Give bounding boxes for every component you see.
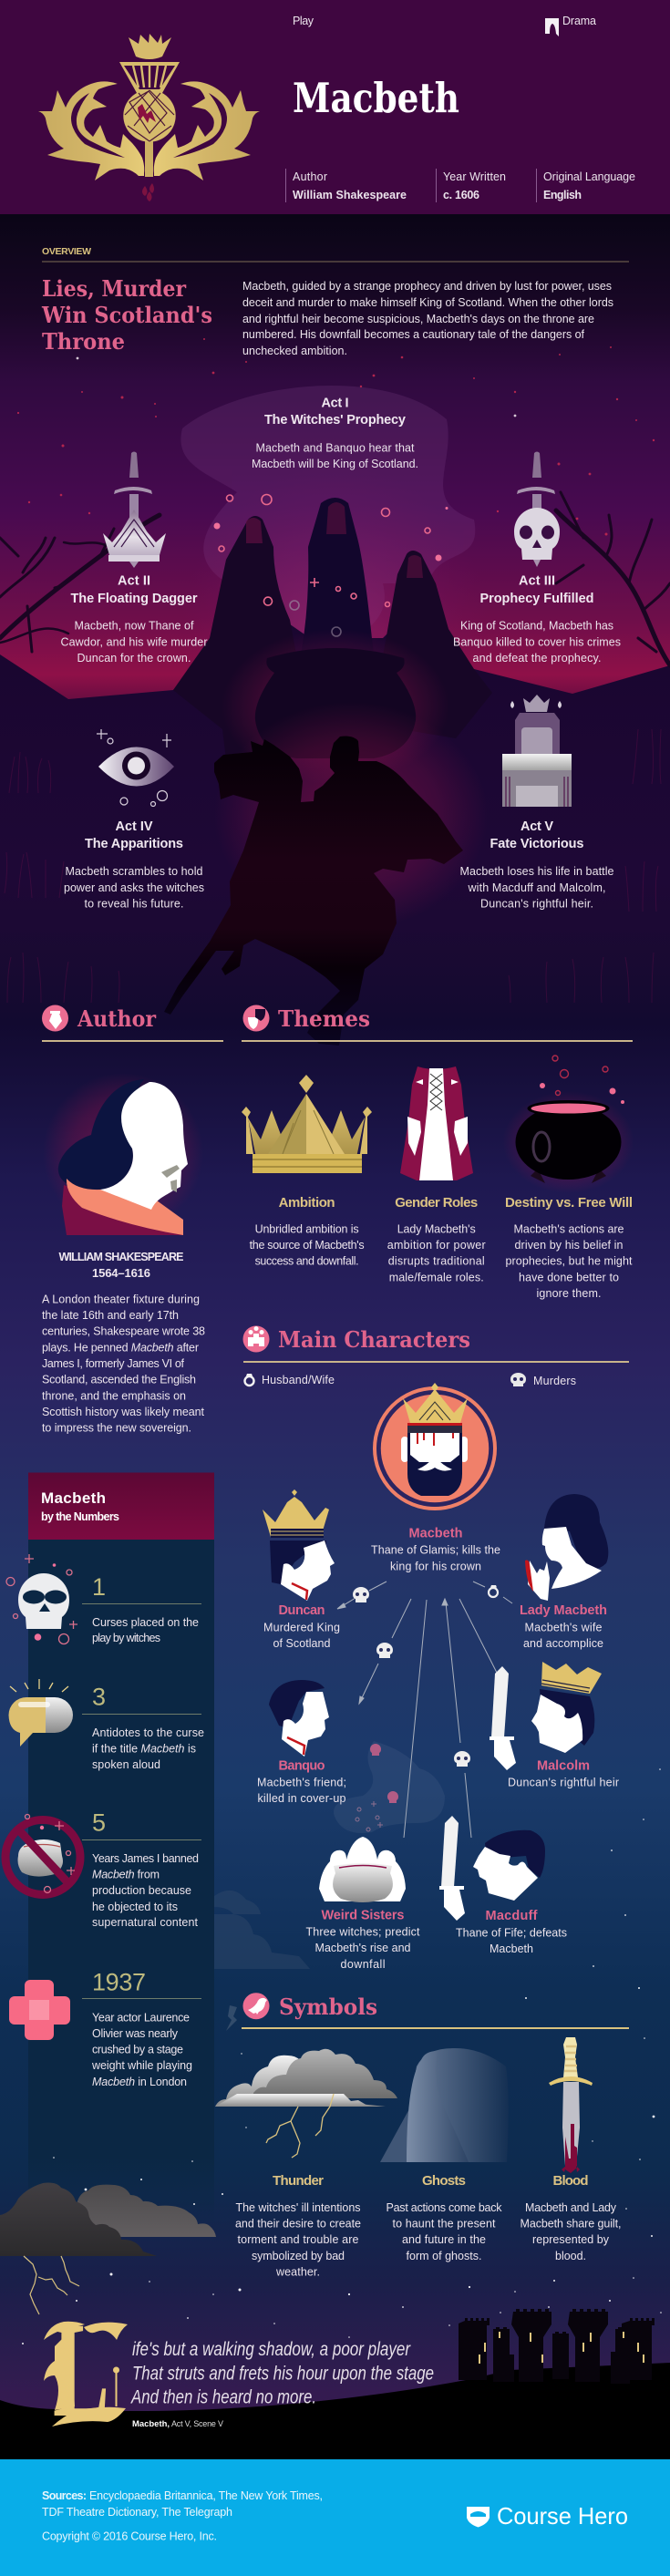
Act V: Fate Victorious bbox=[490, 837, 583, 851]
Act II bbox=[60, 452, 208, 665]
Author heading bbox=[42, 1005, 223, 1042]
stat: 1937 bbox=[9, 1969, 201, 2088]
meta: language: Original Language bbox=[543, 170, 635, 183]
stat: 1937: weight while playing bbox=[91, 2059, 192, 2072]
symbol: thunder bbox=[215, 2049, 397, 2279]
character: Banquo bbox=[257, 1680, 346, 1805]
icon: masks bbox=[248, 1017, 258, 1029]
foreground hill bbox=[0, 2363, 670, 2461]
Symbols heading bbox=[242, 1993, 629, 2029]
cauldron scene bbox=[0, 465, 670, 1030]
genre label bbox=[545, 15, 596, 36]
genre label: Drama bbox=[562, 15, 596, 27]
icon: dagger and crown bbox=[103, 452, 166, 568]
character: Weird Sisters bbox=[306, 1837, 420, 1971]
symbol: ghosts: form of ghosts. bbox=[407, 2250, 481, 2262]
character: Macduff bbox=[439, 1816, 567, 1955]
character: Malcolm: Malcolm bbox=[537, 1759, 590, 1774]
character: Macbeth: Thane of Glamis; kills the bbox=[371, 1544, 500, 1557]
Author biography: throne, and the emphasis on bbox=[42, 1389, 186, 1402]
theme: destiny: have done better to bbox=[519, 1271, 619, 1283]
background clouds bbox=[213, 1891, 310, 2031]
Themes heading bbox=[242, 1005, 633, 1042]
overview paragraph bbox=[242, 280, 613, 357]
theme: gender roles: male/female roles. bbox=[389, 1271, 484, 1283]
stat: 5 years banned: Years James I banned bbox=[92, 1852, 199, 1865]
theme: ambition: the source of Macbeth's bbox=[250, 1239, 365, 1252]
quote attribution: Macbeth, bbox=[132, 2419, 170, 2429]
icon: throne bbox=[502, 695, 572, 807]
character: Lady Macbeth: and accomplice bbox=[523, 1637, 603, 1650]
hills bbox=[0, 583, 670, 1030]
stat: 1937: Macbeth in London bbox=[92, 2076, 187, 2088]
icon: sword bbox=[439, 1816, 465, 1921]
portrait bbox=[473, 1830, 545, 1901]
stat: 3 antidotes bbox=[9, 1679, 204, 1771]
castle bbox=[459, 2309, 655, 2384]
Act I: The Witches' Prophecy bbox=[264, 413, 406, 428]
character: Banquo: Macbeth's friend; bbox=[257, 1777, 346, 1789]
sources: Encyclopaedia Britannica, The New York Times, bbox=[89, 2489, 323, 2502]
overview label: OVERVIEW bbox=[42, 246, 91, 257]
Act II: Cawdor, and his wife murder bbox=[60, 636, 208, 649]
portrait bbox=[375, 1383, 495, 1509]
symbol: ghosts bbox=[380, 2048, 509, 2262]
stat: 1937: Olivier was nearly bbox=[92, 2027, 179, 2040]
portrait bbox=[319, 1837, 406, 1902]
Act V: Duncan's rightful heir. bbox=[480, 897, 593, 910]
portrait bbox=[263, 1489, 335, 1601]
bubbles bbox=[219, 494, 430, 636]
symbol: ghosts: and future in the bbox=[402, 2233, 486, 2246]
character: Malcolm bbox=[490, 1662, 619, 1789]
symbol: thunder: weather. bbox=[275, 2266, 320, 2279]
symbol: thunder: symbolized by bad bbox=[252, 2250, 345, 2262]
theme: destiny: Macbeth's actions are bbox=[514, 1222, 624, 1235]
left witch bbox=[173, 516, 310, 775]
Act II: Duncan for the crown. bbox=[77, 652, 191, 665]
character: Macduff: Macbeth bbox=[490, 1942, 533, 1955]
Shakespeare name: WILLIAM SHAKESPEARE bbox=[58, 1251, 184, 1263]
sources: TDF Theatre Dictionary, The Telegraph bbox=[42, 2506, 232, 2519]
right witch bbox=[383, 551, 492, 738]
icon: banned cauldron bbox=[5, 1814, 80, 1894]
character: Lady Macbeth: Macbeth's wife bbox=[525, 1622, 603, 1634]
Act V: Macbeth loses his life in battle bbox=[459, 865, 614, 878]
character: Weird Sisters: downfall bbox=[341, 1958, 385, 1971]
character: Weird Sisters: Weird Sisters bbox=[321, 1908, 405, 1922]
copyright: Copyright © 2016 Course Hero, Inc. bbox=[42, 2530, 217, 2543]
Act IV: power and asks the witches bbox=[64, 881, 204, 894]
character: Macduff: Thane of Fife; defeats bbox=[456, 1927, 567, 1940]
thistle emblem bbox=[38, 34, 260, 201]
panel header: Macbeth bbox=[41, 1489, 106, 1507]
meta: author: Author bbox=[293, 170, 327, 183]
quote text: And then is heard no more. bbox=[129, 2387, 316, 2408]
portrait bbox=[269, 1680, 329, 1757]
theme: ambition: success and downfall. bbox=[255, 1255, 359, 1268]
theme: destiny: driven by his belief in bbox=[514, 1239, 624, 1252]
meta: year: c. 1606 bbox=[443, 189, 479, 201]
quote text: That struts and frets his hour upon the stage bbox=[132, 2364, 434, 2385]
Course Hero logo: Course Hero bbox=[497, 2502, 628, 2530]
legend: murders: Murders bbox=[533, 1375, 576, 1387]
icon: sword bbox=[490, 1666, 516, 1770]
cauldron bbox=[255, 648, 416, 758]
character: Macbeth: Macbeth bbox=[408, 1526, 463, 1540]
Act III: Banquo killed to cover his crimes bbox=[453, 636, 621, 649]
icon: people bbox=[248, 1326, 264, 1346]
storm clouds bbox=[0, 2183, 216, 2314]
symbol: blood bbox=[520, 2037, 622, 2262]
Act I: Act I bbox=[321, 396, 348, 410]
stat: 5 years banned: production because bbox=[92, 1884, 191, 1897]
theme: gender roles: Gender Roles bbox=[395, 1195, 478, 1211]
icon: storm cloud bbox=[215, 2049, 397, 2158]
stat: 1937: crushed by a stage bbox=[92, 2044, 183, 2056]
smoke and skulls bbox=[334, 1741, 445, 1833]
character: Duncan bbox=[263, 1489, 340, 1650]
overview heading: Lies, Murder bbox=[42, 275, 186, 302]
character: Duncan: Duncan bbox=[279, 1603, 325, 1618]
Act I bbox=[252, 396, 418, 470]
left leaf bbox=[38, 81, 144, 180]
symbol: ghosts: to haunt the present bbox=[392, 2218, 496, 2231]
Author biography: Scottish history was likely meant bbox=[42, 1406, 205, 1418]
footer bbox=[0, 2459, 670, 2576]
theme: gender roles bbox=[387, 1066, 486, 1283]
meta: author: William Shakespeare bbox=[293, 189, 407, 201]
glow bbox=[180, 465, 490, 811]
Author biography bbox=[42, 1293, 205, 1435]
symbol: thunder: torment and trouble are bbox=[237, 2233, 359, 2246]
relation icons bbox=[353, 1585, 498, 1767]
character: Weird Sisters: Three witches; predict bbox=[306, 1926, 420, 1939]
Act III bbox=[453, 452, 621, 665]
symbol: thunder: Thunder bbox=[273, 2173, 324, 2189]
theme: destiny: ignore them. bbox=[536, 1287, 602, 1300]
character: Banquo: Banquo bbox=[279, 1759, 325, 1774]
sparks bbox=[17, 338, 655, 536]
Act III: Act III bbox=[519, 574, 555, 589]
symbol: blood: Blood bbox=[552, 2173, 589, 2189]
Shakespeare name: 1564–1616 bbox=[92, 1266, 150, 1280]
portrait bbox=[531, 1662, 602, 1753]
icon: pen nib bbox=[49, 1011, 62, 1029]
Act II: The Floating Dagger bbox=[71, 592, 198, 606]
character: Banquo: killed in cover-up bbox=[257, 1792, 346, 1805]
theme: gender roles: disrupts traditional bbox=[388, 1255, 485, 1268]
legend: husband/wife: Husband/Wife bbox=[262, 1374, 335, 1386]
symbol: thunder: and their desire to create bbox=[235, 2218, 361, 2231]
icon: skull bbox=[6, 1554, 77, 1644]
symbol: blood: represented by bbox=[532, 2233, 610, 2246]
stat: 1937: 1937 bbox=[92, 1969, 146, 1996]
icon: raven bbox=[248, 1998, 267, 2014]
Author heading: Author bbox=[77, 1005, 156, 1032]
theme: ambition: Unbridled ambition is bbox=[255, 1222, 359, 1235]
overview paragraph: unchecked ambition. bbox=[242, 345, 347, 357]
character: Macbeth: king for his crown bbox=[390, 1561, 481, 1573]
Main Characters heading bbox=[242, 1325, 629, 1363]
stat: 1 curses: 1 bbox=[92, 1573, 106, 1601]
Act II: Macbeth, now Thane of bbox=[75, 620, 194, 633]
character: Weird Sisters: Macbeth's rise and bbox=[315, 1942, 411, 1954]
Author biography: James I, formerly James VI of bbox=[42, 1357, 185, 1370]
overview paragraph: Macbeth, guided by a strange prophecy and driven by lust for power, uses bbox=[242, 280, 612, 293]
relation arrows bbox=[337, 1582, 512, 1838]
Act III: King of Scotland, Macbeth has bbox=[460, 620, 613, 633]
meta: year: Year Written bbox=[443, 170, 506, 183]
Author biography: centuries, Shakespeare wrote 38 bbox=[42, 1325, 205, 1338]
stat: 5 years banned: 5 bbox=[92, 1808, 106, 1836]
horseman silhouette bbox=[164, 702, 488, 1046]
title: Macbeth bbox=[293, 74, 459, 122]
right tree bbox=[556, 492, 670, 665]
sources: Sources: bbox=[42, 2489, 87, 2502]
Act V: Act V bbox=[521, 819, 553, 834]
overview heading bbox=[41, 275, 212, 355]
right leaf bbox=[154, 81, 260, 180]
numbers panel bbox=[5, 1473, 214, 2224]
Symbols heading: Symbols bbox=[279, 1994, 377, 2020]
icon: cauldron bbox=[503, 1056, 634, 1193]
quote text: ife's but a walking shadow, a poor player bbox=[132, 2339, 411, 2360]
stat: 3 antidotes: spoken aloud bbox=[92, 1758, 160, 1771]
Author biography: the late 16th and early 17th bbox=[42, 1309, 179, 1322]
panel header: by the Numbers bbox=[41, 1510, 119, 1523]
Shakespeare name bbox=[58, 1251, 184, 1280]
left tree bbox=[0, 515, 160, 652]
overview paragraph: deceit and murder to make himself King of Scotland. When the other lords bbox=[242, 296, 613, 309]
Act IV bbox=[64, 729, 204, 910]
symbol: blood: Macbeth share guilt, bbox=[520, 2218, 622, 2231]
Author biography: to impress the new sovereign. bbox=[42, 1422, 191, 1435]
overview heading: Win Scotland's bbox=[41, 302, 212, 328]
Act I: Macbeth will be King of Scotland. bbox=[252, 458, 418, 470]
stat: 5 years banned: Macbeth from bbox=[92, 1869, 160, 1881]
portrait bbox=[525, 1494, 608, 1601]
character: Duncan: of Scotland bbox=[273, 1637, 331, 1650]
Act III: Prophecy Fulfilled bbox=[479, 592, 594, 606]
character: Duncan: Murdered King bbox=[263, 1622, 340, 1634]
Shakespeare portrait bbox=[43, 1073, 203, 1235]
drop cap: L bbox=[53, 2294, 109, 2446]
meta: author bbox=[285, 169, 407, 202]
stat: 1 curses: play by witches bbox=[92, 1632, 160, 1644]
overview paragraph: numbered. His downfall becomes a cautionary tale of the dangers of bbox=[242, 328, 585, 341]
theme: gender roles: Lady Macbeth's bbox=[397, 1222, 476, 1235]
type label: Play bbox=[293, 15, 314, 27]
Main Characters heading: Main Characters bbox=[278, 1326, 470, 1353]
symbol: blood: Macbeth and Lady bbox=[525, 2201, 617, 2214]
Author biography: plays. He penned Macbeth after bbox=[42, 1341, 199, 1354]
sources bbox=[42, 2489, 323, 2519]
character: Malcolm: Duncan's rightful heir bbox=[508, 1777, 619, 1789]
theme: destiny bbox=[503, 1056, 634, 1300]
stat: 3 antidotes: 3 bbox=[92, 1683, 106, 1710]
stat: 5 years banned: he objected to its bbox=[92, 1901, 178, 1913]
stat: 1937: Year actor Laurence bbox=[92, 2011, 190, 2024]
quote text bbox=[129, 2339, 434, 2408]
grass bbox=[5, 729, 661, 1003]
theme: ambition: Ambition bbox=[279, 1195, 335, 1211]
Act IV: Macbeth scrambles to hold bbox=[66, 865, 203, 878]
theme: destiny: prophecies, but he might bbox=[505, 1255, 633, 1268]
panel header bbox=[28, 1473, 214, 1540]
quote attribution bbox=[132, 2419, 223, 2429]
Themes heading: Themes bbox=[278, 1005, 370, 1032]
icon: crown bbox=[242, 1075, 372, 1173]
quote attribution: Act V, Scene V bbox=[171, 2419, 223, 2428]
Act IV: to reveal his future. bbox=[84, 897, 184, 910]
header band bbox=[0, 0, 670, 214]
Act IV: Act IV bbox=[115, 819, 153, 834]
stat: 5 years banned bbox=[5, 1808, 201, 1929]
stat: 1 curses: Curses placed on the bbox=[92, 1616, 199, 1629]
meta: language: English bbox=[543, 189, 582, 201]
Act IV: The Apparitions bbox=[85, 837, 183, 851]
symbol: thunder: The witches' ill intentions bbox=[235, 2201, 361, 2214]
Author biography: A London theater fixture during bbox=[42, 1293, 200, 1305]
character: Lady Macbeth bbox=[520, 1494, 608, 1650]
stat: 3 antidotes: Antidotes to the curse bbox=[92, 1726, 204, 1739]
icon: dagger bbox=[549, 2037, 593, 2173]
character: Macduff: Macduff bbox=[485, 1909, 538, 1923]
meta: language bbox=[536, 169, 635, 202]
Act V: with Macduff and Malcolm, bbox=[467, 881, 605, 894]
stars bbox=[22, 1768, 662, 2344]
theme: ambition bbox=[242, 1075, 372, 1268]
character: Macbeth bbox=[371, 1383, 500, 1573]
theme: destiny: Destiny vs. Free Will bbox=[505, 1195, 633, 1211]
cauldron glow bbox=[222, 629, 449, 784]
symbol: ghosts: Ghosts bbox=[422, 2173, 466, 2189]
Act III: and defeat the prophecy. bbox=[472, 652, 602, 665]
overview heading: Throne bbox=[42, 328, 125, 355]
theme: gender roles: ambition for power bbox=[387, 1239, 486, 1252]
legend: murders bbox=[510, 1373, 576, 1387]
Act V bbox=[459, 695, 614, 910]
smoke bbox=[180, 386, 475, 656]
symbol: blood: blood. bbox=[555, 2250, 586, 2262]
icon: dagger and skull bbox=[514, 452, 560, 567]
symbol: ghosts: Past actions come back bbox=[387, 2201, 502, 2214]
Act II: Act II bbox=[118, 574, 150, 589]
overview paragraph: and rightful heir become suspicious, Macbeth's days on the throne are bbox=[242, 313, 594, 325]
Author biography: Scotland, ascended the English bbox=[42, 1374, 196, 1386]
character: Lady Macbeth: Lady Macbeth bbox=[520, 1603, 607, 1618]
stat: 1 curses bbox=[6, 1554, 201, 1644]
meta: year bbox=[436, 169, 506, 202]
icon: eye bbox=[97, 729, 174, 806]
stat: 5 years banned: supernatural content bbox=[92, 1916, 199, 1929]
stat: 3 antidotes: if the title Macbeth is bbox=[92, 1743, 196, 1756]
icon: pill speech bubble bbox=[9, 1679, 73, 1747]
Act I: Macbeth and Banquo hear that bbox=[255, 441, 415, 454]
icon: dress bbox=[400, 1066, 473, 1180]
quote bbox=[44, 2294, 434, 2446]
icon: bandage bbox=[9, 1980, 70, 2040]
centre witch bbox=[301, 498, 374, 656]
icon: ghost bbox=[380, 2048, 509, 2162]
